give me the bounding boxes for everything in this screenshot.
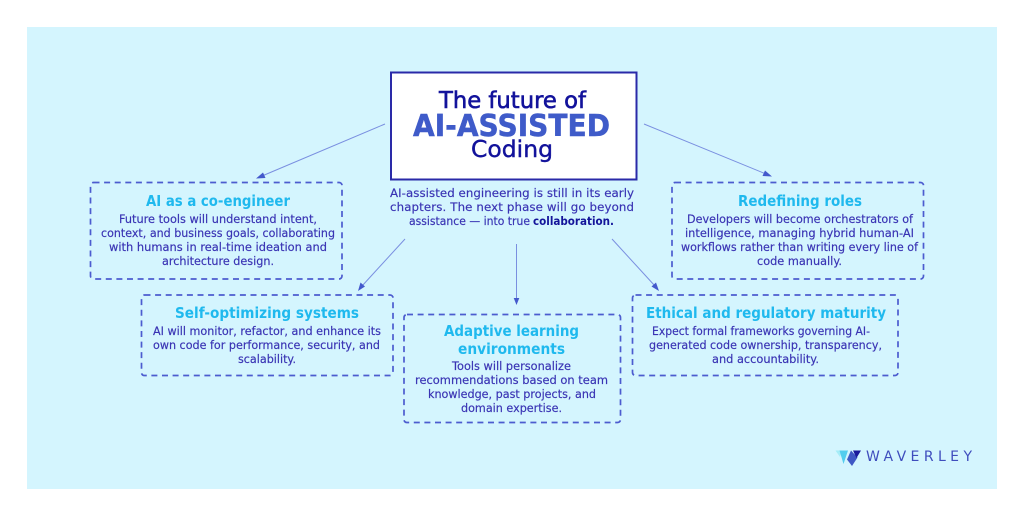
title line: Coding: Coding [471,137,553,163]
body: Redefining roles: intelligence, managing hybrid human-AI [685,226,914,240]
body: AI as a co-engineer: Future tools will understand intent, [119,212,317,226]
intro text: assistance — into true [409,214,530,228]
body: AI as a co-engineer: with humans in real-time ideation and [109,240,327,254]
arrow to AI as a co-engineer [256,124,385,178]
body: Adaptive learning environments: domain expertise. [461,401,562,415]
arrow to Adaptive learning environments [514,244,519,305]
body: Adaptive learning environments: knowledge, past projects, and [428,387,596,401]
heading: Redefining roles: Redefining roles [738,192,862,210]
body: Self-optimizing systems [153,324,381,366]
heading: Adaptive learning environments [444,322,579,358]
intro text: collaboration. [533,214,614,228]
heading: Ethical and regulatory maturity: Ethical and regulatory maturity [646,304,886,322]
body: Ethical and regulatory maturity: generated code ownership, transparency, [649,338,882,352]
body: Ethical and regulatory maturity: Expect formal frameworks governing AI- [652,324,870,338]
intro text: AI-assisted engineering is still in its early [390,186,634,200]
heading: Adaptive learning environments: environments [458,340,565,358]
panel: AI as a co-engineer [90,182,342,279]
body: Adaptive learning environments: Tools will personalize [451,359,571,373]
body: Redefining roles [681,212,919,268]
intro text [390,186,634,228]
body: Adaptive learning environments [415,359,608,415]
panel: Self-optimizing systems [142,295,393,376]
heading: AI as a co-engineer: AI as a co-engineer [146,192,291,210]
panel: Redefining roles [672,182,924,279]
logo: Waverley [836,449,972,466]
title line: The future of: The future of [438,88,587,114]
title line: AI-ASSISTED: AI-ASSISTED [413,109,610,144]
title box [391,72,636,180]
body: Ethical and regulatory maturity [649,324,882,366]
arrow to Self-optimizing systems [358,239,405,291]
body: Ethical and regulatory maturity: and accountability. [712,352,819,366]
icon: Waverley mark [836,450,861,466]
intro text: chapters. The next phase will go beyond [390,200,634,214]
wordmark: WAVERLEY [866,449,972,465]
body: AI as a co-engineer: context, and business goals, collaborating [101,226,335,240]
arrow to Redefining roles [644,124,772,176]
body: AI as a co-engineer [101,212,335,268]
heading: Adaptive learning environments: Adaptive learning [444,322,579,340]
body: Self-optimizing systems: own code for performance, security, and [153,338,380,352]
body: Self-optimizing systems: scalability. [238,352,296,366]
heading: Self-optimizing systems: Self-optimizing systems [175,304,359,322]
body: Adaptive learning environments: recommendations based on team [415,373,608,387]
arrow to Ethical and regulatory maturity [612,239,659,291]
body: Redefining roles: workflows rather than writing every line of [681,240,919,254]
panel: Ethical and regulatory maturity [632,295,898,376]
body: AI as a co-engineer: architecture design. [162,254,274,268]
body: Self-optimizing systems: AI will monitor, refactor, and enhance its [153,324,381,338]
panel: Adaptive learning environments [404,314,620,422]
body: Redefining roles: code manually. [757,254,842,268]
body: Redefining roles: Developers will become orchestrators of [687,212,914,226]
